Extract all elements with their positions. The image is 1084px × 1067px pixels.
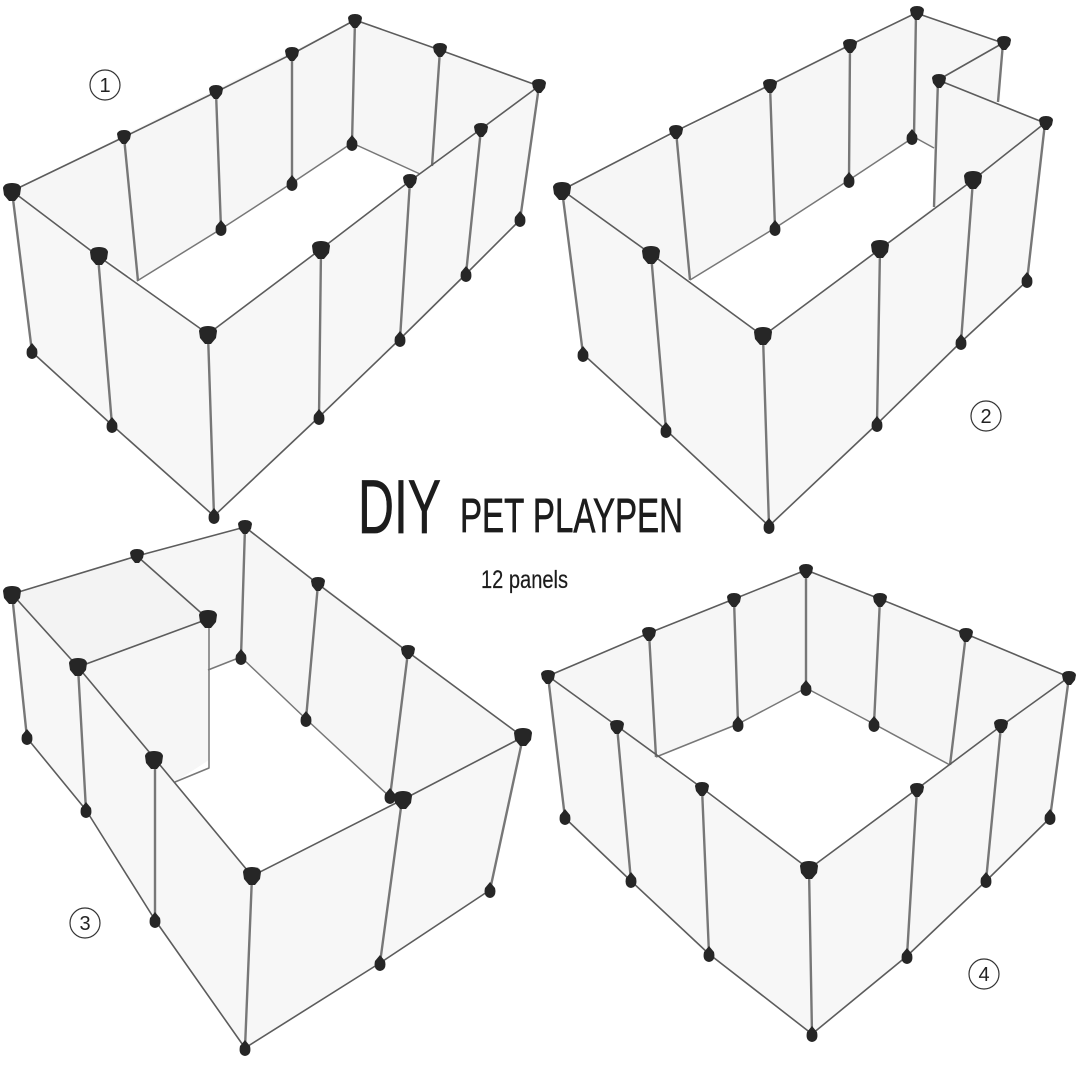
- playpen 3: rectangle with covered box: [3, 520, 532, 1056]
- playpen 2: rectangle with notch: [553, 6, 1053, 534]
- number badge 3: 3: [79, 913, 91, 935]
- number badge 2: 2: [980, 406, 992, 428]
- number badge 3: [70, 908, 100, 938]
- title: [358, 465, 683, 550]
- box cover panel: [12, 556, 208, 667]
- number badge 1: 1: [99, 75, 111, 97]
- number badge 4: [969, 959, 999, 989]
- playpen 4: square: [541, 564, 1076, 1042]
- playpen 1: long rectangle: [3, 14, 546, 524]
- subtitle: 12 panels: 12 panels: [481, 566, 568, 594]
- title: PET PLAYPEN: [460, 490, 683, 543]
- title: DIY: [358, 465, 441, 550]
- number badge 4: 4: [978, 964, 990, 986]
- number badge 1: [90, 70, 120, 100]
- number badge 2: [971, 401, 1001, 431]
